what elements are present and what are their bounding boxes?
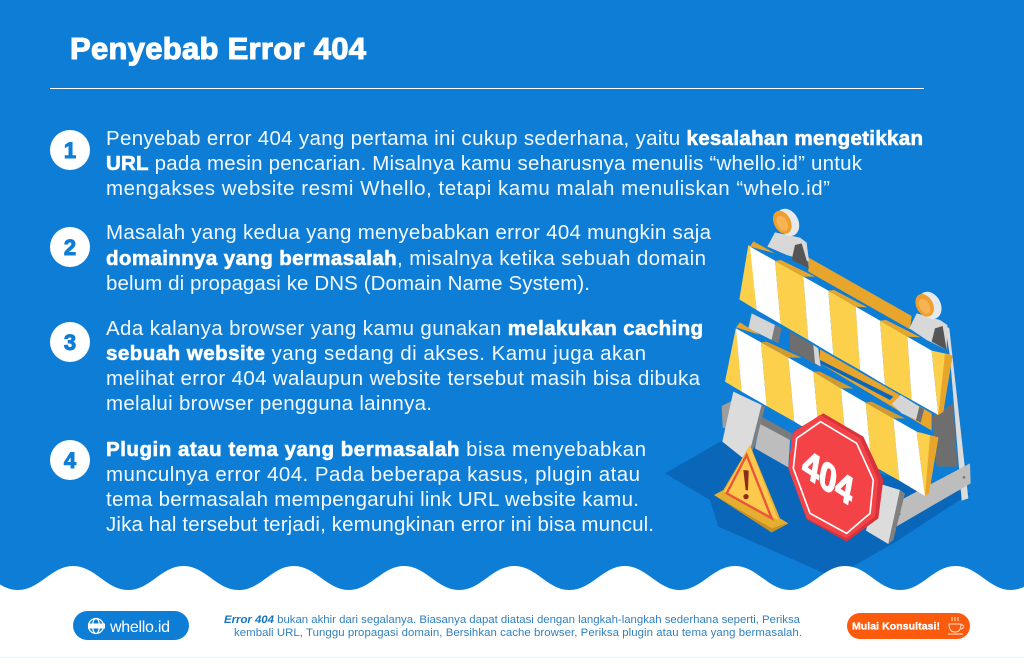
logo pill: whello.id: whello.id (109, 619, 170, 636)
button: Mulai Konsultasi: Mulai Konsultasi! (852, 620, 940, 632)
text block 3: sebuah website yang sedang di akses. Kamu juga akan (106, 342, 646, 365)
logo pill: whello.id (73, 611, 189, 640)
title: Penyebab Error 404 (70, 31, 367, 66)
label: 404: 404 (800, 440, 857, 515)
badge 1 (50, 130, 90, 170)
text block 3: melihat error 404 walaupun website tersebut masih bisa dibuka (106, 367, 701, 390)
footer bottom edge (0, 657, 1024, 658)
badge 1: 1 (64, 138, 76, 163)
text block 4: munculnya error 404. Pada beberapa kasus, plugin atau (106, 463, 640, 486)
item 2 (50, 221, 712, 295)
item 1 (50, 127, 923, 200)
badge 3 (50, 322, 90, 362)
text block 2: Masalah yang kedua yang menyebabkan error 404 mungkin saja (106, 221, 712, 244)
footer with wave edge (0, 566, 1024, 658)
text block 1: URL pada mesin pencarian. Misalnya kamu seharusnya menulis “whello.id” untuk (106, 152, 863, 175)
text block 1 (106, 127, 923, 200)
footer note (224, 614, 802, 639)
text block 1: Penyebab error 404 yang pertama ini cukup sederhana, yaitu kesalahan mengetikkan (106, 127, 923, 150)
barrier legs and base (722, 313, 971, 544)
badge 3: 3 (64, 330, 76, 355)
stop sign: 404 (788, 413, 883, 542)
left lamp and bracket (767, 205, 809, 268)
icon: coffee cup (948, 617, 964, 634)
badge 2 (50, 227, 90, 267)
text block 3 (106, 317, 703, 415)
ground shadow (665, 440, 970, 575)
footer note: kembali URL, Tunggu propagasi domain, Bersihkan cache browser, Periksa plugin atau tema yang bermasalah. (234, 627, 802, 639)
text block 4: tema bermasalah mempengaruhi link URL website kamu. (106, 488, 639, 511)
text block 2: belum di propagasi ke DNS (Domain Name System). (106, 272, 590, 295)
badge 4 (50, 440, 90, 480)
badge 4: 4 (64, 448, 77, 473)
item 3 (50, 317, 703, 415)
upper striped board (739, 241, 953, 415)
text block 4: Plugin atau tema yang bermasalah bisa menyebabkan (106, 438, 646, 461)
back rails (808, 257, 932, 431)
warning triangle (714, 445, 788, 532)
button: Mulai Konsultasi (847, 613, 970, 639)
text block 2: domainnya yang bermasalah, misalnya ketika sebuah domain (106, 247, 706, 270)
illustration: road barrier with 404 sign (665, 205, 971, 575)
text block 3: melalui browser pengguna lainnya. (106, 392, 432, 415)
text block 2 (106, 221, 712, 295)
text block 3: Ada kalanya browser yang kamu gunakan melakukan caching (106, 317, 703, 340)
footer note: Error 404 bukan akhir dari segalanya. Biasanya dapat diatasi dengan langkah-langkah sederhana seperti, Periksa (224, 614, 801, 626)
text block 4: Jika hal tersebut terjadi, kemungkinan error ini bisa muncul. (106, 513, 654, 536)
text block 1: mengakses website resmi Whello, tetapi kamu malah menuliskan “whelo.id” (106, 177, 830, 200)
icon: globe (88, 618, 105, 634)
text block 4 (106, 438, 654, 536)
item 4 (50, 438, 654, 536)
right lamp and bracket (909, 288, 947, 350)
badge 2: 2 (64, 235, 76, 260)
lower striped board (725, 322, 938, 496)
